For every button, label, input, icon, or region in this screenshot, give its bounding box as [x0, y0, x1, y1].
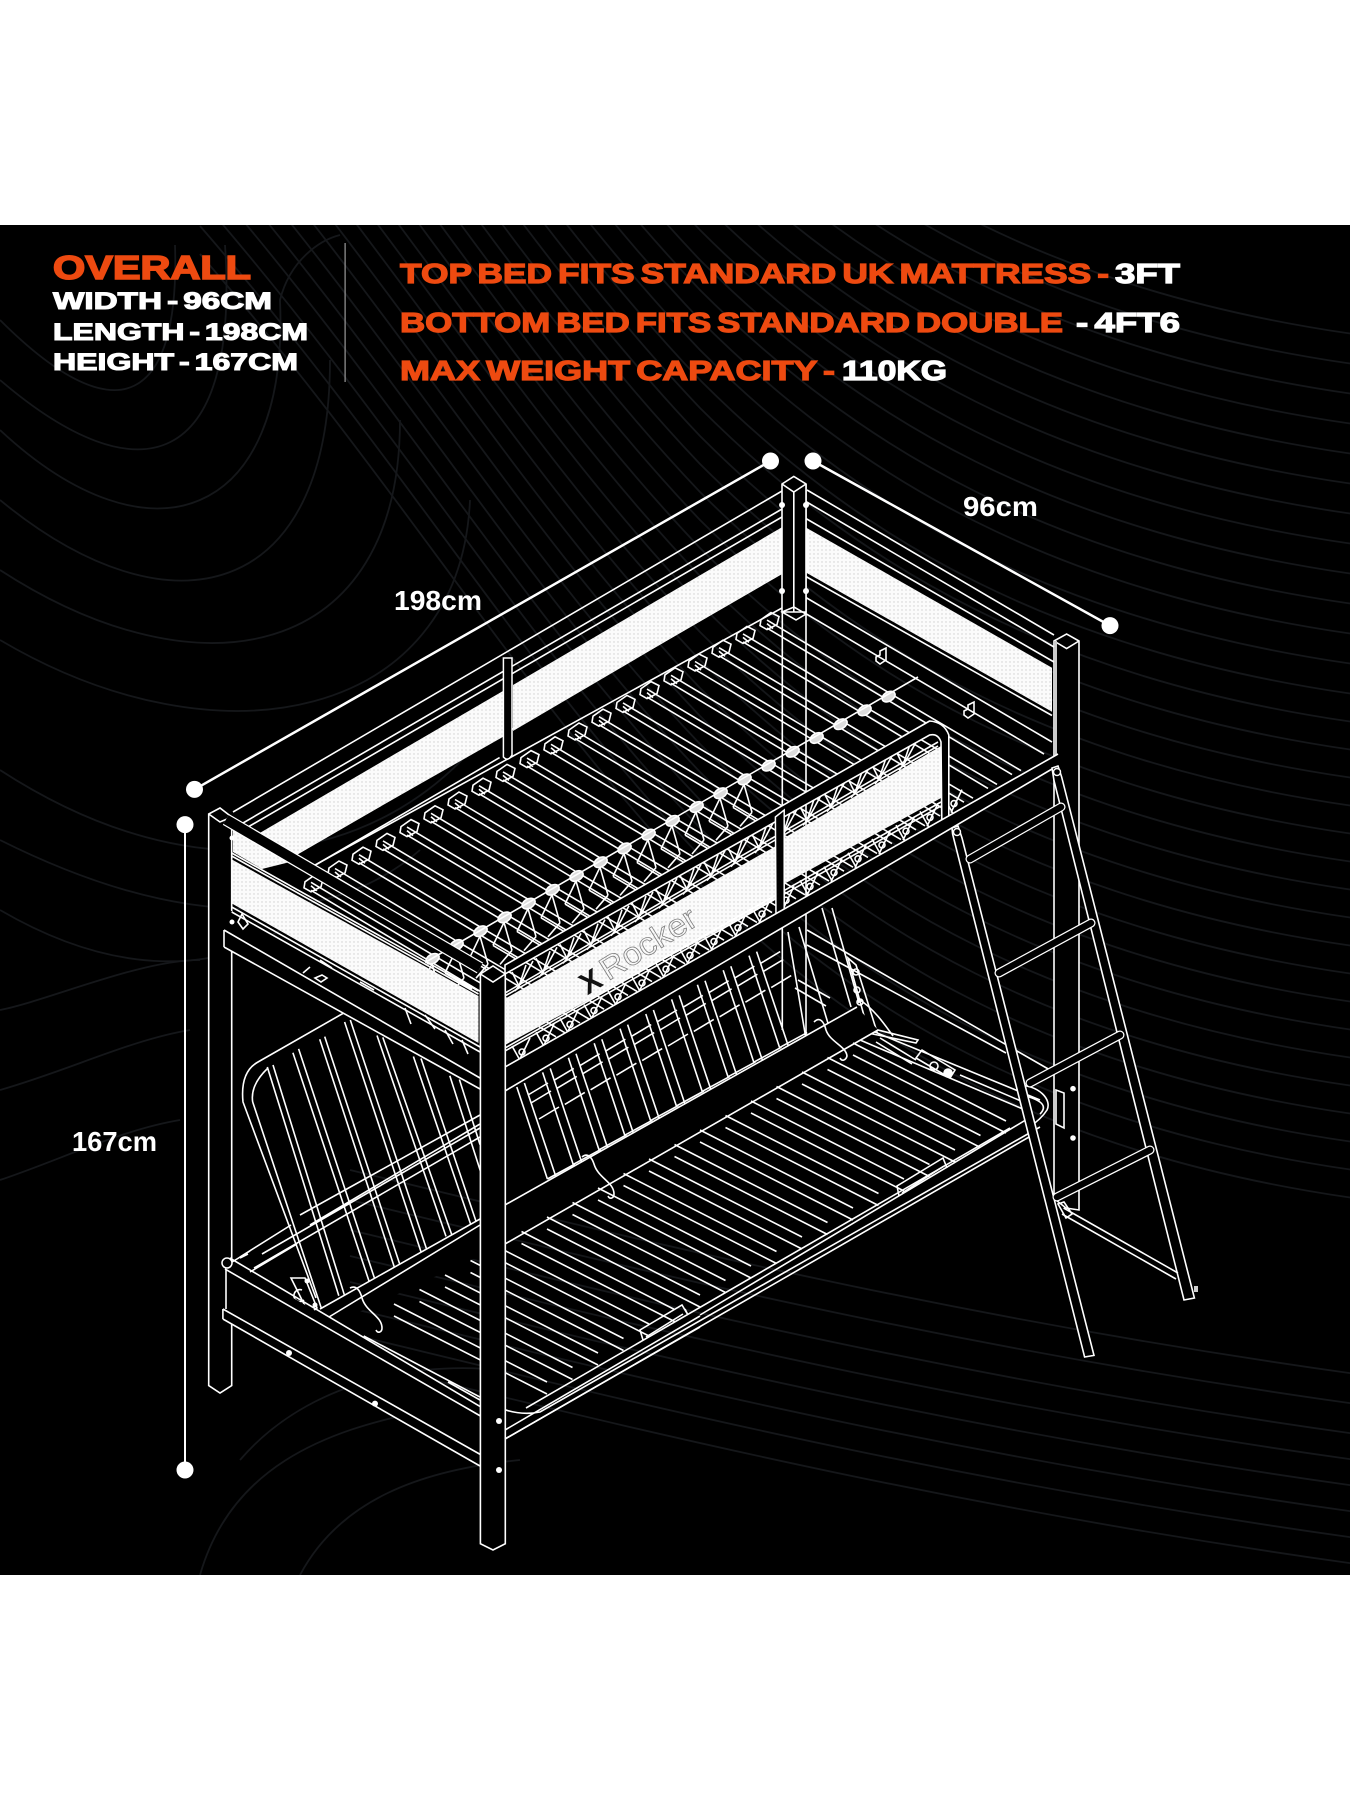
brand mark: X — [574, 963, 608, 1001]
dimension: 96cm: 96cm — [963, 491, 1038, 522]
specification lines: 110KG — [842, 355, 947, 386]
lower bed side rails — [222, 1251, 700, 1466]
heading: overall dimensions: HEIGHT - 167CM — [53, 349, 298, 376]
back wall of top bed — [233, 491, 784, 869]
brand mark — [572, 899, 704, 1001]
left rear post — [209, 808, 232, 1393]
ladder rungs — [970, 807, 1150, 1197]
contour background lines — [0, 225, 1350, 1575]
lower bed rear rails and mechanism — [788, 908, 1050, 1128]
right post — [1054, 634, 1079, 1210]
front guard rail panel — [505, 721, 962, 1062]
dimension: 167cm — [72, 816, 194, 1478]
specification lines: 3FT — [1115, 258, 1180, 289]
dimension: 198cm — [186, 452, 779, 798]
lower bed sofa back — [240, 952, 878, 1325]
specification lines: - 4FT6 — [1076, 307, 1180, 338]
heading: overall dimensions: OVERALL — [53, 249, 251, 286]
divider — [344, 243, 346, 382]
lower bed seat slats — [364, 1043, 1040, 1439]
specification lines: MAX WEIGHT CAPACITY - — [400, 355, 835, 386]
heading: overall dimensions — [53, 249, 308, 376]
right end wall of top bed — [803, 490, 1054, 754]
specification lines: TOP BED FITS STANDARD UK MATTRESS - — [400, 258, 1109, 289]
bunk bed drawing — [209, 476, 1198, 1550]
specification lines: BOTTOM BED FITS STANDARD DOUBLE — [400, 307, 1063, 338]
hinge band — [320, 1007, 878, 1325]
dimension: 198cm: 198cm — [394, 585, 482, 616]
rear corner post top — [779, 476, 809, 620]
left short wall of top bed — [224, 820, 480, 1090]
front corner post — [480, 966, 505, 1550]
top bed slats — [304, 608, 1021, 1037]
heading: overall dimensions: LENGTH - 198CM — [53, 319, 308, 346]
ladder — [952, 766, 1198, 1357]
dimension: 167cm: 167cm — [72, 1126, 157, 1157]
rear corner posts lower — [782, 484, 806, 1045]
heading: overall dimensions: WIDTH - 96CM — [53, 288, 272, 315]
dimension: 96cm — [804, 452, 1118, 634]
brand mark: Rocker — [593, 899, 704, 987]
front side rail — [505, 754, 1062, 1091]
black panel — [0, 225, 1350, 1575]
specification lines — [400, 258, 1180, 386]
S-shaped hooks — [350, 1020, 847, 1332]
